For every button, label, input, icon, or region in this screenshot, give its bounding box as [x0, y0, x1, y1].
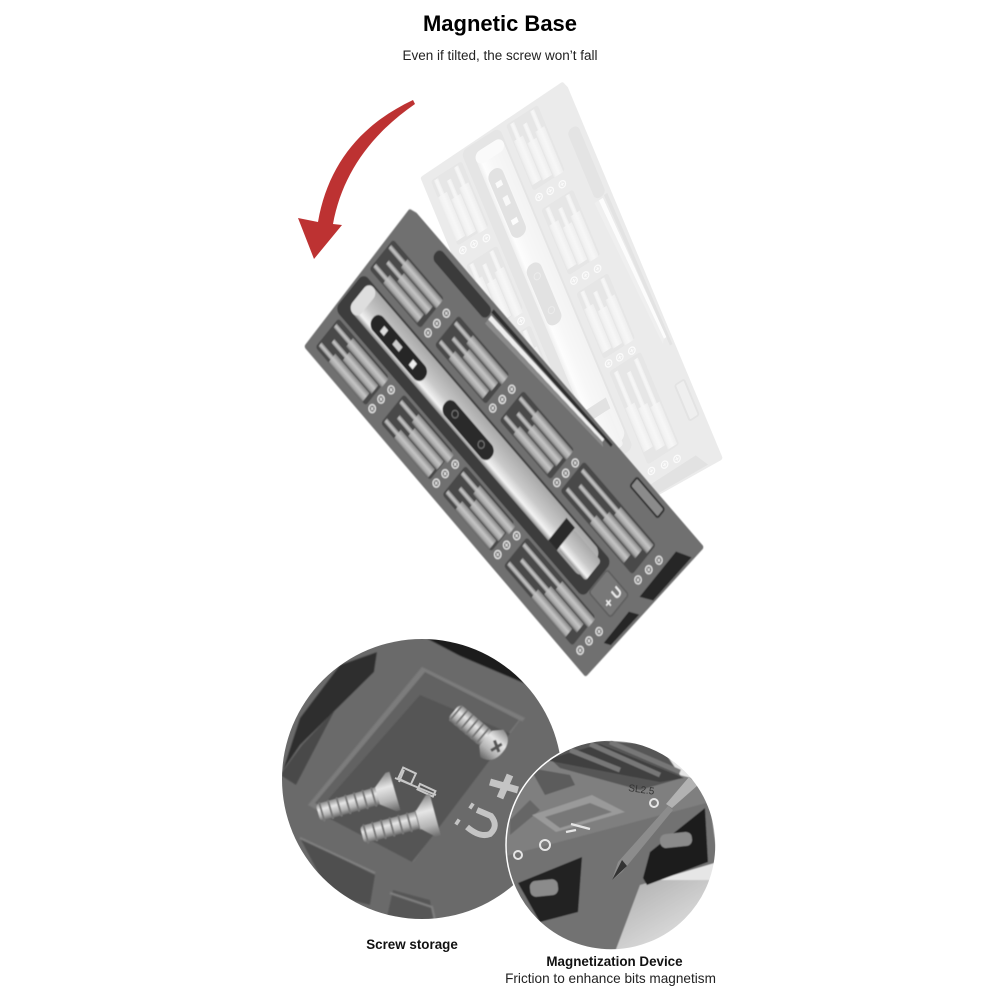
- magnified circle: magnetization device: [506, 740, 716, 950]
- icon: silver plus: [490, 775, 518, 798]
- caption: magnetization device: [505, 954, 716, 986]
- caption: magnetization device: Friction to enhance bits magnetism: [505, 970, 716, 986]
- icon: embossed tool logo: [395, 768, 436, 797]
- icon: screw top right: [448, 705, 508, 760]
- title: Magnetic Base: [423, 11, 577, 36]
- icon: screw lower left: [316, 772, 400, 821]
- subtitle: Even if tilted, the screw won’t fall: [402, 48, 598, 63]
- grey screwdriver case with bits: [303, 211, 701, 682]
- ghost tilted case: [420, 84, 720, 550]
- magnifier outline: [506, 740, 716, 950]
- magnified circle: screw storage: [280, 636, 564, 925]
- caption: screw storage: Screw storage: [366, 937, 458, 952]
- red curved arrow: [298, 100, 415, 259]
- icon: silver magnet: [456, 805, 495, 835]
- icon: screw lower middle: [360, 794, 440, 844]
- icon: screwdriver bit: [612, 777, 698, 880]
- label: bit marking: SL2.5: [628, 783, 655, 798]
- label: plus and magnet marking: + U: [601, 583, 625, 612]
- caption: magnetization device: Magnetization Device: [546, 954, 683, 968]
